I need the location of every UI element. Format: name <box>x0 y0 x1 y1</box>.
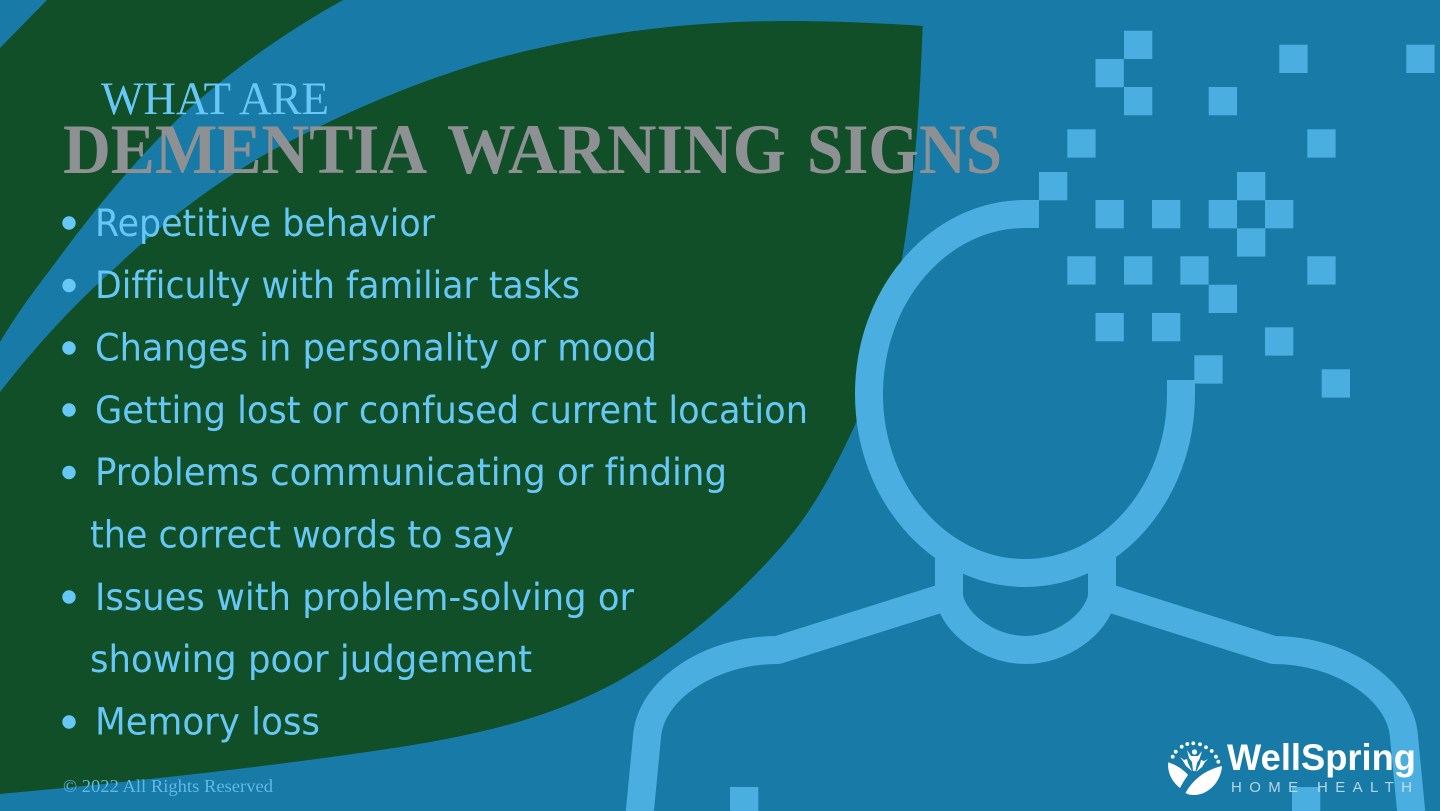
title line two: SIGNS <box>807 111 1002 189</box>
WellSpring Home Health logo <box>1168 737 1416 796</box>
title line one: WHAT ARE <box>101 73 329 125</box>
green leaf shape <box>0 0 923 794</box>
left shoulder and arm <box>639 596 950 811</box>
list item: familiar tasks: Difficulty with familiar tasks <box>95 264 580 307</box>
person outline icon <box>639 214 1412 811</box>
neck and collar <box>949 550 1102 650</box>
title line two: WARNING <box>447 111 786 189</box>
list item: problem-solving, second line: showing poor judgement <box>90 638 532 681</box>
warning signs bullet list <box>62 202 808 744</box>
right shoulder and arm <box>1101 596 1412 811</box>
title line two <box>63 111 1002 189</box>
title <box>63 73 1002 189</box>
list item: lost or confused: Getting lost or confused current location <box>95 389 808 432</box>
icon: logo mark <box>1168 741 1222 795</box>
list item: problem-solving: Issues with problem-solving or <box>95 576 635 619</box>
title line two: DEMENTIA <box>63 111 427 189</box>
list item: repetitive behavior: Repetitive behavior <box>95 202 436 245</box>
list item: communicating: Problems communicating or finding <box>95 451 727 494</box>
logo wordmark: WellSpring <box>1227 737 1416 778</box>
bullet markers <box>62 216 76 729</box>
copyright: © 2022 All Rights Reserved <box>63 776 273 796</box>
list item: memory loss: Memory loss <box>95 700 320 744</box>
dissolving pixel squares <box>730 31 1435 811</box>
head outline <box>869 214 1181 573</box>
list item: communicating, second line: the correct words to say <box>90 514 514 556</box>
list item: personality or mood: Changes in personality or mood <box>95 326 657 370</box>
logo tagline: HOME HEALTH <box>1231 779 1412 796</box>
